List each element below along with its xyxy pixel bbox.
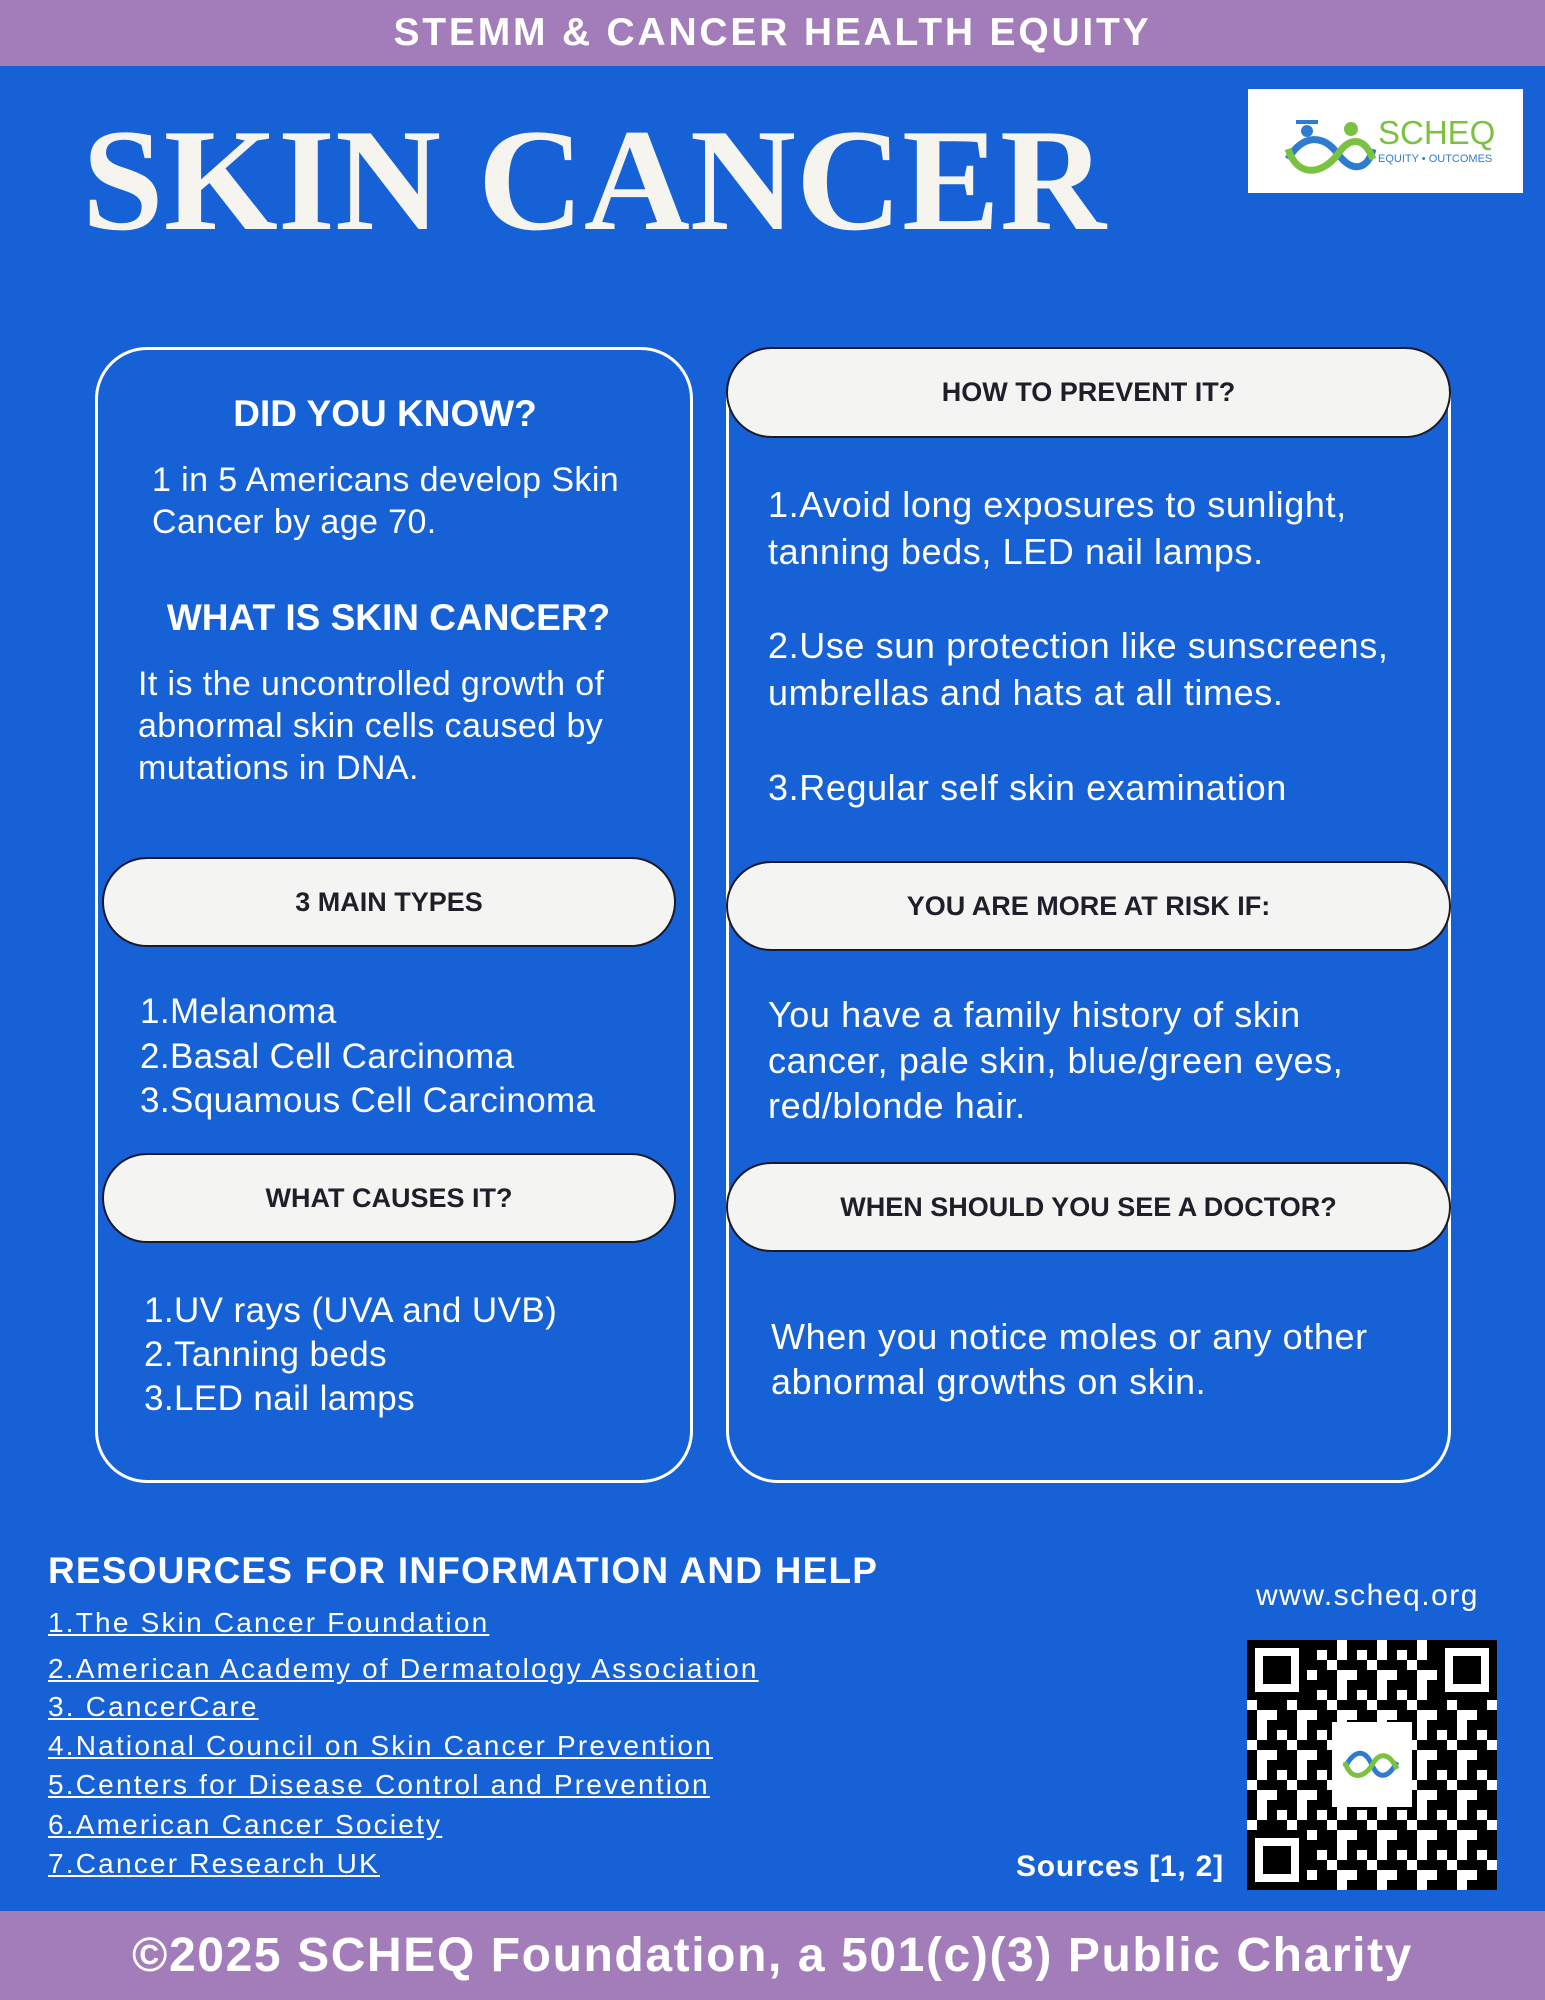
list: prevention: 1.Avoid long exposures to sunlight, xyxy=(768,484,1347,525)
logo: SCHEQ xyxy=(1378,114,1495,151)
list: types xyxy=(140,992,596,1120)
pill: 3 main types: 3 MAIN TYPES xyxy=(295,886,483,916)
footer banner: ©2025 SCHEQ Foundation, a 501(c)(3) Public Charity xyxy=(132,1929,1413,1982)
pill: what causes it: WHAT CAUSES IT? xyxy=(266,1182,512,1212)
text: stat: Cancer by age 70. xyxy=(152,503,437,541)
text: stat xyxy=(152,461,619,541)
text: stat: 1 in 5 Americans develop Skin xyxy=(152,461,619,499)
list: prevention: 2.Use sun protection like sunscreens, xyxy=(768,625,1389,666)
heading: resources: RESOURCES FOR INFORMATION AND HELP xyxy=(48,1550,878,1591)
list: resource links xyxy=(48,1607,759,1879)
list: resource links: 2.American Academy of Dermatology Association xyxy=(48,1653,759,1684)
heading: did you know: DID YOU KNOW? xyxy=(233,393,537,434)
text: doctor: abnormal growths on skin. xyxy=(771,1361,1206,1402)
list: resource links: 4.National Council on Skin Cancer Prevention xyxy=(48,1730,713,1761)
pill: doctor: WHEN SHOULD YOU SEE A DOCTOR? xyxy=(840,1192,1337,1222)
list: types: 2.Basal Cell Carcinoma xyxy=(140,1036,515,1076)
pill: 3 main types xyxy=(102,857,676,947)
text: definition: abnormal skin cells caused by xyxy=(138,707,603,745)
text: risk factors: cancer, pale skin, blue/green eyes, xyxy=(768,1040,1343,1080)
list: prevention: tanning beds, LED nail lamps. xyxy=(768,531,1264,572)
list: resource links: 6.American Cancer Society xyxy=(48,1809,442,1840)
text: doctor: When you notice moles or any other xyxy=(771,1316,1368,1357)
heading: what is skin cancer: WHAT IS SKIN CANCER? xyxy=(167,597,610,638)
list: types: 3.Squamous Cell Carcinoma xyxy=(140,1081,595,1120)
sources: Sources [1, 2] xyxy=(1016,1850,1224,1883)
text: doctor xyxy=(771,1316,1368,1402)
list: prevention: 3.Regular self skin examination xyxy=(768,767,1287,808)
list: resource links: 1.The Skin Cancer Foundation xyxy=(48,1607,489,1638)
pill: what causes it xyxy=(102,1153,676,1243)
qr code xyxy=(1247,1640,1497,1890)
website: www.scheq.org xyxy=(1256,1579,1479,1612)
pill: how to prevent xyxy=(726,347,1451,438)
list: causes: 2.Tanning beds xyxy=(144,1335,387,1374)
list: prevention: umbrellas and hats at all times. xyxy=(768,672,1283,713)
list: resource links: 5.Centers for Disease Control and Prevention xyxy=(48,1769,710,1800)
text: risk factors xyxy=(768,994,1343,1126)
top banner: STEMM & CANCER HEALTH EQUITY xyxy=(393,11,1152,54)
text: definition xyxy=(138,665,604,787)
text: risk factors: You have a family history of skin xyxy=(768,994,1301,1035)
pill: risk: YOU ARE MORE AT RISK IF: xyxy=(907,890,1270,920)
text: risk factors: red/blonde hair. xyxy=(768,1085,1026,1126)
panel: right xyxy=(726,347,1451,1483)
text: definition: It is the uncontrolled growth of xyxy=(138,665,604,703)
list: causes: 3.LED nail lamps xyxy=(144,1379,415,1418)
list: resource links: 7.Cancer Research UK xyxy=(48,1848,380,1879)
pill: risk xyxy=(726,861,1451,951)
pill: how to prevent: HOW TO PREVENT IT? xyxy=(942,377,1235,407)
list: types: 1.Melanoma xyxy=(140,992,337,1031)
list: causes: 1.UV rays (UVA and UVB) xyxy=(144,1291,557,1330)
footer banner xyxy=(0,1911,1545,2000)
pill: doctor xyxy=(726,1162,1451,1252)
list: causes xyxy=(144,1291,557,1418)
panel: left xyxy=(95,347,693,1483)
list: resource links: 3. CancerCare xyxy=(48,1691,259,1722)
text: definition: mutations in DNA. xyxy=(138,749,419,787)
list: prevention xyxy=(768,484,1389,808)
logo: EQUITY • OUTCOMES xyxy=(1378,153,1492,165)
logo xyxy=(1248,89,1523,193)
top banner xyxy=(0,0,1545,66)
